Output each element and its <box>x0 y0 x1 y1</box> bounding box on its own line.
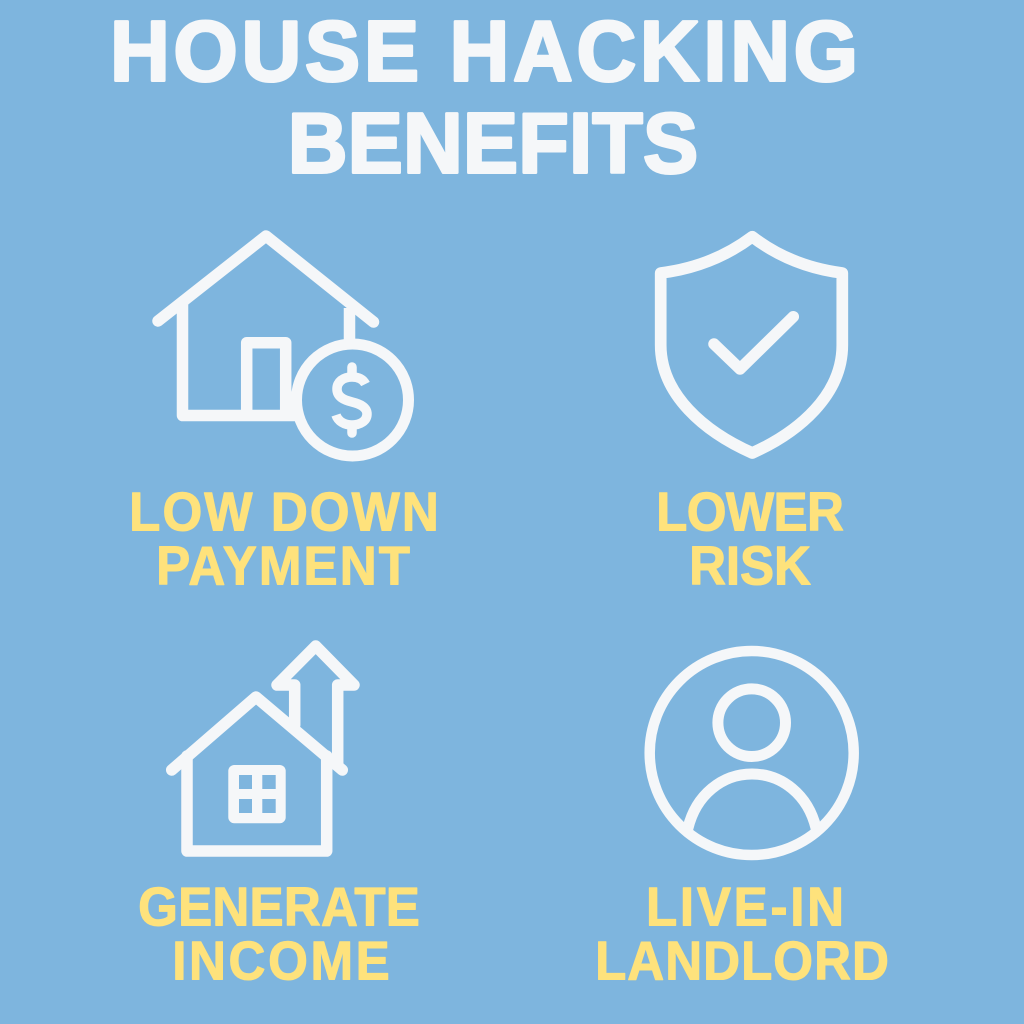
label: lower risk <box>656 482 844 597</box>
icon: shield with check <box>661 237 842 453</box>
label: generate income <box>138 877 420 992</box>
icon: house with dollar coin <box>158 236 408 456</box>
label: low down payment: PAYMENT <box>156 536 410 597</box>
label: lower risk: LOWER <box>656 482 844 543</box>
window <box>228 765 286 823</box>
icon: house with up arrow <box>172 646 354 851</box>
title <box>110 3 858 191</box>
label: live-in landlord: LIVE-IN <box>646 877 844 938</box>
label: live-in landlord <box>595 877 889 992</box>
label: generate income: INCOME <box>172 931 390 992</box>
title: HOUSE HACKING <box>110 3 858 99</box>
label: generate income: GENERATE <box>138 877 420 938</box>
label: low down payment <box>129 482 439 597</box>
label: low down payment: LOW DOWN <box>129 482 439 543</box>
title: BENEFITS <box>288 96 698 191</box>
icon: person in circle <box>650 651 854 855</box>
label: lower risk: RISK <box>689 536 811 597</box>
label: live-in landlord: LANDLORD <box>595 931 889 992</box>
